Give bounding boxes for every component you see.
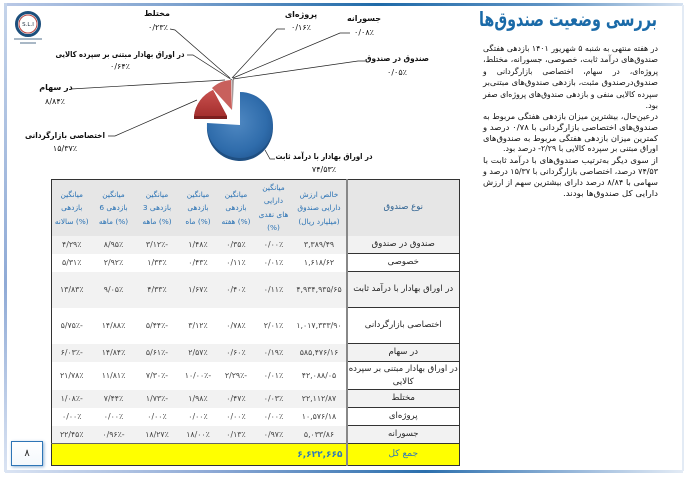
label: mixed: ۰/۲۳٪ xyxy=(148,23,168,32)
table header row: میانگین xyxy=(262,183,285,192)
row: fund of funds: ۰/۰۰٪ xyxy=(264,240,283,249)
label: market maker: اختصاصی بازارگردانی xyxy=(25,130,105,140)
row: market maker: ۵/۴۴٪- xyxy=(146,321,168,330)
row: market maker: اختصاصی بازارگردانی xyxy=(365,320,442,330)
body text: صندوق‌های اختصاصی بازارگردانی با ۰/۷۸ درصد و xyxy=(482,122,658,132)
row: commodity deposit xyxy=(60,364,458,386)
row: fixed income: ۰/۴۰٪ xyxy=(226,285,246,294)
row: private xyxy=(62,257,419,267)
row: private: ۰/۰۱٪ xyxy=(264,258,283,267)
row: market maker: ۲/۰۱٪ xyxy=(264,321,283,330)
table header row: بازدهی 6 xyxy=(99,203,128,212)
row: market maker: ۵/۷۵٪- xyxy=(61,321,83,330)
row: market maker: ۳/۱۲٪ xyxy=(188,321,208,330)
row: total: ۶,۶۲۲,۶۶۵ xyxy=(297,450,342,460)
row: commodity deposit: ۱۱/۸۱٪ xyxy=(102,371,125,380)
row: stocks xyxy=(52,344,459,362)
page number box: ۸ xyxy=(24,448,30,459)
row: private: ۲/۹۲٪ xyxy=(104,258,123,267)
row: venture: ۰/۹۶٪- xyxy=(102,430,125,439)
row: venture: ۰/۹۷٪ xyxy=(264,430,283,439)
label: project: ۰/۱۶٪ xyxy=(291,23,311,32)
row: commodity deposit: ۴۲,۰۸۸/۰۵ xyxy=(302,371,336,380)
body text xyxy=(482,43,659,198)
table header row: (%) xyxy=(267,223,280,232)
label: market maker: ۱۵/۳۷٪ xyxy=(53,144,77,153)
page frame: left bar xyxy=(4,3,7,472)
row: project: پروژه‌ای xyxy=(389,411,418,421)
label: market maker xyxy=(25,100,197,153)
row: fixed income: ۴,۹۳۴,۹۳۵/۶۵ xyxy=(296,285,342,294)
row: commodity deposit: در اوراق بهادار مبتنی بر سپرده کالایی xyxy=(349,364,458,386)
row: stocks: ۲/۵۷٪ xyxy=(188,348,208,357)
pie: stock slice xyxy=(212,80,232,110)
label: venture: ۰/۰۸٪ xyxy=(354,28,374,37)
label: commodity deposit xyxy=(56,50,232,80)
logo: S.L.I xyxy=(22,22,34,28)
page number box xyxy=(11,441,43,466)
row: stocks: ۵۸۵,۴۷۶/۱۶ xyxy=(300,348,338,357)
label: commodity deposit: ۰/۶۴٪ xyxy=(110,62,130,71)
label: stocks: ۸/۸۴٪ xyxy=(45,97,65,106)
page frame: right bar xyxy=(682,5,684,471)
row: total xyxy=(52,444,459,465)
row: fixed income: ۰/۱۱٪ xyxy=(264,285,283,294)
row: project xyxy=(62,411,418,421)
row: venture xyxy=(52,426,459,443)
row: stocks: ۵/۶۱٪- xyxy=(146,348,168,357)
table header row xyxy=(52,180,459,465)
body text: در هفته منتهی به شنبه ۵ شهریور ۱۴۰۱ بازدهی هفتگی xyxy=(483,43,658,53)
row: mixed xyxy=(52,390,459,408)
table header row: دارایی xyxy=(264,196,283,205)
row: venture: ۲۲/۴۵٪ xyxy=(60,430,84,439)
body text: پروژه‌ای، در سهام، اختصاصی بازارگردانی و xyxy=(482,66,658,76)
label: fund of funds xyxy=(233,54,429,79)
body text: کمترین میزان بازدهی هفتگی مربوط به صندوق‌های xyxy=(483,133,658,143)
row: private: خصوصی xyxy=(388,257,419,267)
row: project: ۰/۰۰٪ xyxy=(104,412,123,421)
table header row: بازدهی xyxy=(225,203,247,212)
table header row: ماهه (%) xyxy=(99,216,128,226)
logo xyxy=(14,12,42,44)
row: venture: ۰/۱۳٪ xyxy=(226,430,246,439)
row: fund of funds: ۰/۳۵٪ xyxy=(226,240,246,249)
body text: ۷۴/۵۳ درصد، اختصاصی بازارگردانی با ۱۵/۳۷ درصد و xyxy=(482,166,659,176)
row: venture: ۵,۰۳۳/۸۶ xyxy=(304,430,334,439)
row: stocks: ۱۴/۸۴٪ xyxy=(102,348,125,357)
row: fund of funds: ۴/۲۹٪ xyxy=(62,240,81,249)
row: private: ۵/۳۱٪ xyxy=(62,258,81,267)
pie: fixed income slice xyxy=(207,92,273,161)
label: mixed xyxy=(144,9,230,78)
body text: بود. xyxy=(646,101,658,110)
label: mixed: مختلط xyxy=(144,9,170,18)
row: fixed income: ۹/۰۵٪ xyxy=(104,285,123,294)
table header row: میانگین xyxy=(146,190,168,198)
row: venture: ۱۸/۰۰٪ xyxy=(186,430,210,439)
row: fund of funds xyxy=(52,236,459,254)
pie: market maker slice xyxy=(194,90,227,119)
body text: دارایی کل صندوق‌ها بودند. xyxy=(563,189,658,198)
row: commodity deposit: ۲/۲۹٪- xyxy=(225,371,247,380)
page frame: top bar xyxy=(5,3,683,6)
row: mixed: ۲۲,۱۱۲/۸۷ xyxy=(302,394,336,403)
label: project: پروژه‌ای xyxy=(285,10,317,19)
label: fixed income xyxy=(265,150,372,174)
row: private: ۱,۶۱۸/۶۲ xyxy=(304,258,334,267)
row: project: ۰/۰۰٪ xyxy=(147,412,167,421)
table header row: دارایی صندوق xyxy=(297,203,341,212)
row: fund of funds: ۱/۴۸٪ xyxy=(188,240,208,249)
row: stocks: ۶/۰۳٪- xyxy=(61,348,83,357)
row: total: جمع کل xyxy=(388,449,418,459)
row: fixed income xyxy=(52,272,459,308)
row: mixed: ۱/۹۸٪ xyxy=(188,394,208,403)
row: stocks: در سهام xyxy=(388,347,418,357)
row: fixed income: در اوراق بهادار با درآمد ثابت xyxy=(353,284,453,294)
row: stocks: ۰/۶۰٪ xyxy=(226,348,246,357)
row: private: ۰/۴۳٪ xyxy=(188,258,208,267)
label: venture xyxy=(233,14,381,78)
row: private: ۱/۳۳٪ xyxy=(147,258,167,267)
row: venture: جسورانه xyxy=(388,429,419,439)
table header row: میانگین xyxy=(102,190,125,198)
label: fixed income: در اوراق بهادار با درآمد ثابت xyxy=(276,151,372,161)
row: mixed: ۱/۰۸٪- xyxy=(61,394,83,403)
row: market maker: ۱,۰۱۷,۳۳۳/۹۰ xyxy=(296,321,342,330)
row: fund of funds: صندوق در صندوق xyxy=(372,239,435,249)
page frame: bottom bar xyxy=(5,470,683,473)
row: private: ۰/۱۱٪ xyxy=(226,258,246,267)
row: mixed: ۱/۷۳٪- xyxy=(146,394,168,403)
row: commodity deposit: ۲۱/۷۸٪ xyxy=(60,371,84,380)
table header row: (میلیارد ریال) xyxy=(298,216,340,226)
table header row: میانگین xyxy=(61,190,83,198)
label: fund of funds: ۰/۰۵٪ xyxy=(387,68,407,77)
row: venture: ۱۸/۲۷٪ xyxy=(145,430,169,439)
row: commodity deposit: ۰/۰۱٪ xyxy=(264,371,283,380)
row: project: ۰/۰۰٪ xyxy=(188,412,208,421)
row: mixed: ۰/۰۳٪ xyxy=(264,394,283,403)
row: fund of funds: ۳/۱۲٪- xyxy=(146,240,168,249)
table header row: بازدهی xyxy=(187,203,209,212)
row: commodity deposit: ۷/۳۰٪- xyxy=(146,371,168,380)
label: fixed income: ۷۴/۵۳٪ xyxy=(312,165,336,174)
label: commodity deposit: در اوراق بهادار مبتنی بر سپرده کالایی xyxy=(56,50,184,59)
table header row: هفته (%) xyxy=(222,216,250,226)
row: fixed income: ۱۳/۸۳٪ xyxy=(60,285,84,294)
body text: صندوق‌درصندوق مثبت، بازدهی صندوق‌های مبتنی‌بر xyxy=(482,78,658,87)
table header row: ماه (%) xyxy=(185,216,211,226)
row: market maker: ۰/۷۸٪ xyxy=(226,321,246,330)
table header row: بازدهی 3 xyxy=(143,203,171,212)
row: fund of funds: ۸/۹۵٪ xyxy=(104,240,123,249)
table header row: های نقدی xyxy=(259,210,288,219)
row: mixed: ۰/۴۷٪ xyxy=(226,394,246,403)
row: fixed income: ۴/۳۳٪ xyxy=(147,285,167,294)
row: project: ۰/۰۰٪ xyxy=(226,412,246,421)
body text: اوراق مبتنی بر سپرده کالایی با ۲/۲۹- درصد بود. xyxy=(503,144,658,153)
body text: سهامی با ۸/۸۴ درصد دارای بیشترین سهم از ارزش xyxy=(483,178,658,187)
table header row: نوع صندوق xyxy=(384,202,423,212)
table header row: بازدهی xyxy=(61,203,82,212)
label: project xyxy=(232,10,317,78)
label: stocks xyxy=(39,80,225,106)
pie: small slices xyxy=(232,79,234,110)
table header row: ماهه (%) xyxy=(142,216,172,226)
table header row: سالانه (%) xyxy=(55,216,89,226)
label: stocks: در سهام xyxy=(39,83,73,92)
row: market maker: ۱۴/۸۸٪ xyxy=(102,321,125,330)
row: project: ۰/۰۰٪ xyxy=(62,412,81,421)
body text: صندوق‌های درآمد ثابت، خصوصی، جسورانه، مختلط، xyxy=(483,54,658,64)
row: fixed income: ۱/۶۷٪ xyxy=(188,285,208,294)
label: fund of funds: صندوق در صندوق xyxy=(365,54,429,63)
funds table xyxy=(51,179,460,466)
row: mixed: ۷/۴۴٪ xyxy=(104,394,123,403)
row: fund of funds: ۳,۳۸۹/۴۹ xyxy=(304,240,334,249)
row: market maker xyxy=(61,319,442,330)
table header row: میانگین xyxy=(187,190,209,198)
row: project: ۱۰,۵۷۶/۱۸ xyxy=(302,412,336,421)
row: commodity deposit: ۱۰/۰۰٪- xyxy=(185,371,211,380)
row: mixed: مختلط xyxy=(392,393,415,403)
row: stocks: ۰/۱۹٪ xyxy=(264,348,283,357)
label: venture: جسورانه xyxy=(347,14,381,23)
body text: سپرده کالایی منفی و بازدهی صندوق‌های پروژه‌ای صفر xyxy=(482,90,658,99)
row: project: ۰/۰۰٪ xyxy=(264,412,283,421)
body text: درعین‌حال، بیشترین میزان بازدهی هفتگی مربوط به xyxy=(483,111,658,121)
table header row: میانگین xyxy=(225,190,247,198)
body text: از سوی دیگر به‌ترتیب صندوق‌های با درآمد ثابت با xyxy=(483,155,658,165)
table header row: خالص ارزش xyxy=(300,190,338,198)
